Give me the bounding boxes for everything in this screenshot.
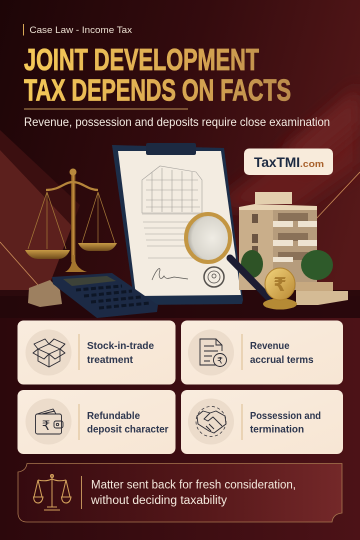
card: refundable deposit character [18,390,176,454]
card: possession and termination: Possession and [250,410,321,422]
title: JOINT DEVELOPMENT [24,43,259,77]
title rule [24,108,188,110]
trees and planter [241,250,348,305]
seal [204,267,224,287]
logo badge: TaxTMI [254,155,300,170]
card: refundable deposit character: deposit character [87,424,168,436]
building [239,192,317,290]
clipboard with document [112,143,243,305]
icon: gold scale [34,474,71,510]
logo badge: .com [300,159,324,170]
card: stock-in-trade treatment: Stock-in-trade [87,340,154,352]
card: possession and termination [181,390,343,454]
icon: wallet with rupee: ₹ [42,419,50,434]
icon: handshake [196,406,226,436]
conclusion banner: Matter sent back for fresh consideration, [91,480,296,492]
rupee coins: ₹ [273,274,287,296]
card: revenue accrual terms [181,320,343,384]
eyebrow label: Case Law - Income Tax [30,25,132,36]
icon: wallet with rupee [36,409,63,434]
logo badge [244,148,333,175]
rupee coins [263,268,297,310]
card: revenue accrual terms: accrual terms [250,354,314,366]
card: stock-in-trade treatment [18,320,176,384]
illustration: desk scene [25,143,348,318]
magnifying glass [186,214,268,297]
card: revenue accrual terms: Revenue [250,340,290,352]
card: possession and termination: termination [250,424,304,436]
calculator [52,273,158,318]
icon: document with rupee [200,339,226,366]
conclusion banner: without deciding taxability [90,495,227,507]
card: stock-in-trade treatment: treatment [87,354,133,366]
icon: open box [33,339,65,367]
conclusion banner [18,464,342,522]
subtitle: Revenue, possession and deposits require close examination [24,115,330,129]
card: refundable deposit character: Refundable [87,410,140,422]
balance scale [25,168,117,307]
title [24,43,291,108]
icon: document with rupee: ₹ [217,356,223,366]
